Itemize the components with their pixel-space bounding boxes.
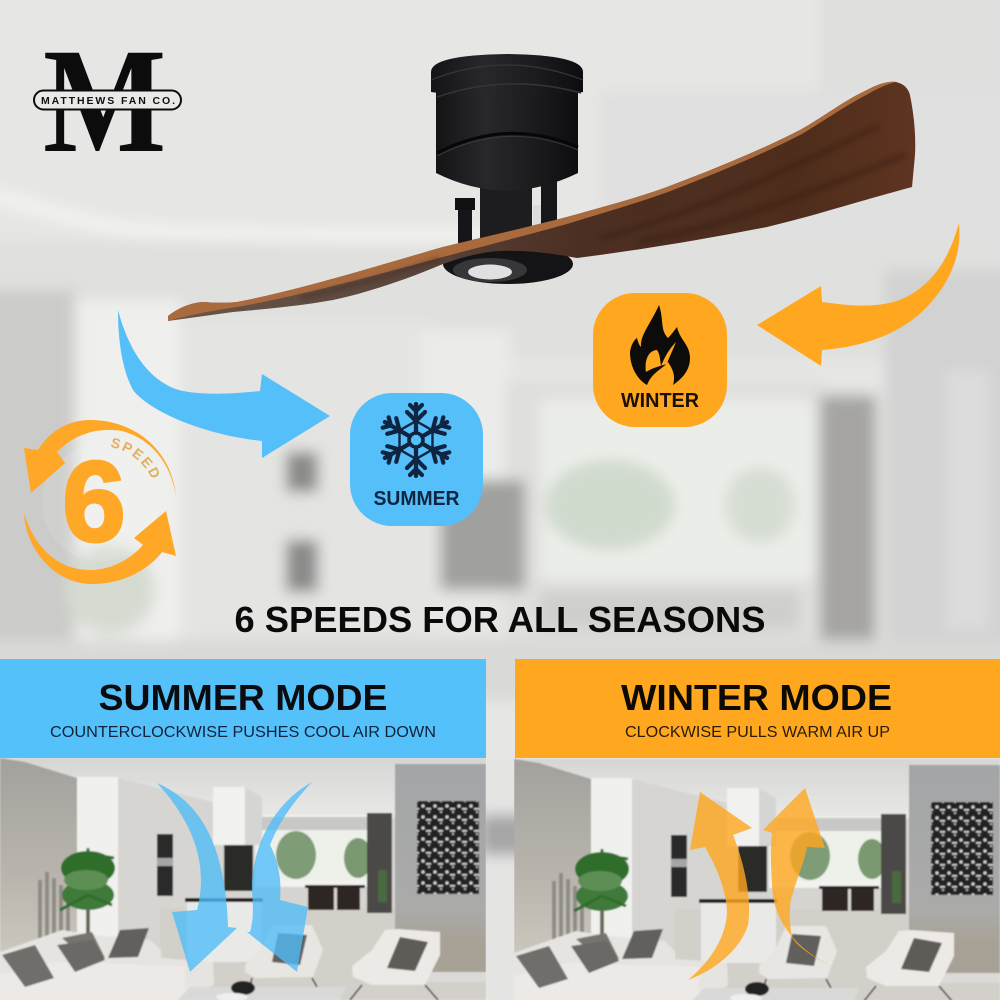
summer description: COUNTERCLOCKWISE PUSHES COOL AIR DOWN (50, 724, 436, 741)
logo: Matthews Fan Co.: MATTHEWS FAN CO. (41, 95, 175, 107)
big numeral 6: 6 (62, 439, 126, 566)
badge: summer (350, 393, 483, 526)
logo: Matthews Fan Co.: M (43, 19, 166, 184)
winter header band (515, 659, 1000, 758)
summer header band (0, 659, 486, 758)
arrow: winter orange curved arrow (757, 223, 959, 366)
winter room photo (514, 759, 1000, 1000)
label: winter: WINTER (621, 390, 700, 412)
panel: summer mode (0, 659, 486, 1000)
fan blades (168, 82, 915, 321)
title: 6 SPEEDS FOR ALL SEASONS (234, 599, 766, 640)
winter description: CLOCKWISE PULLS WARM AIR UP (625, 724, 890, 741)
translucent dial centre (42, 445, 158, 561)
summer heading: SUMMER MODE (98, 677, 388, 718)
arrow: summer blue curved arrow (118, 310, 330, 458)
bottom circular arrow (24, 511, 176, 584)
label: summer: SUMMER (374, 488, 460, 510)
speed label: SPEED (111, 438, 159, 478)
summer room photo (0, 758, 486, 1000)
winter airflow arrows (688, 788, 845, 980)
winter heading: WINTER MODE (621, 677, 892, 718)
badge: winter (593, 293, 727, 427)
summer airflow arrows (157, 782, 312, 972)
fan hub and LED light (443, 244, 573, 284)
fan: ceiling fan with wooden blades (168, 54, 915, 321)
icon: flame (630, 305, 690, 385)
top circular arrow (24, 420, 176, 497)
icon: 6 speed dial (24, 420, 176, 584)
panel: winter mode (514, 659, 1000, 1000)
icon: snowflake (380, 404, 452, 476)
fan motor housing (431, 54, 583, 250)
